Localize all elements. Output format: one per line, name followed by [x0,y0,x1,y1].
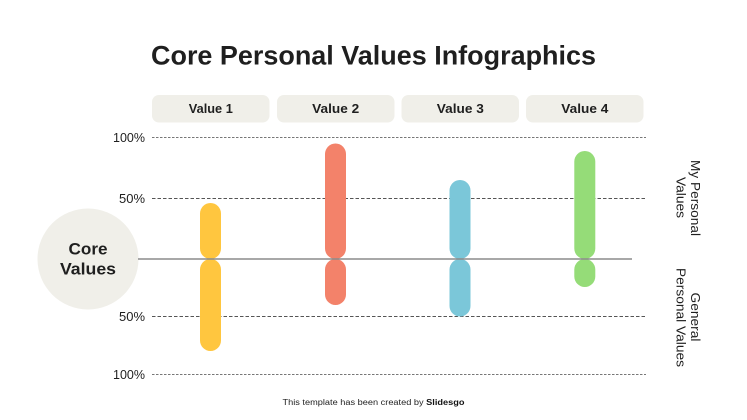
bars: Value 3 [450,180,470,316]
header: Value 2: Value 2 [312,101,359,116]
bars: Value 1 [200,203,221,351]
side label: General Personal Values: Personal Values [674,268,688,367]
bars: Value 2 [325,144,346,305]
bar chart [200,144,595,351]
percentage axis labels [113,130,145,382]
bars: Value 4 [574,151,595,287]
footer credit: This template has been created by Slidesgo [282,398,465,407]
title: Core Personal Values Infographics [151,40,596,70]
circle: Core Values: Core [68,240,108,258]
side label: My Personal Values: My Personal [688,160,702,236]
circle: Core Values [38,208,138,310]
header: Value 3: Value 3 [437,101,484,116]
header: Value 1: Value 1 [189,101,233,116]
side label: My Personal Values: Values [674,177,688,218]
header: Value 3 [402,95,519,122]
header: Value 2 [277,95,394,122]
header: Value 4 [526,95,644,122]
label: lower 50%: 50% [119,309,145,324]
header: Value 4: Value 4 [561,101,609,116]
side label: General Personal Values: General [688,292,702,342]
circle: Core Values: Values [60,260,116,278]
label: upper 50%: 50% [119,191,145,206]
side label: General Personal Values [674,268,702,367]
side label: My Personal Values [674,160,702,236]
label: lower 100%: 100% [113,367,145,382]
column headers [152,95,644,122]
label: upper 100%: 100% [113,130,145,145]
header: Value 1 [152,95,270,122]
